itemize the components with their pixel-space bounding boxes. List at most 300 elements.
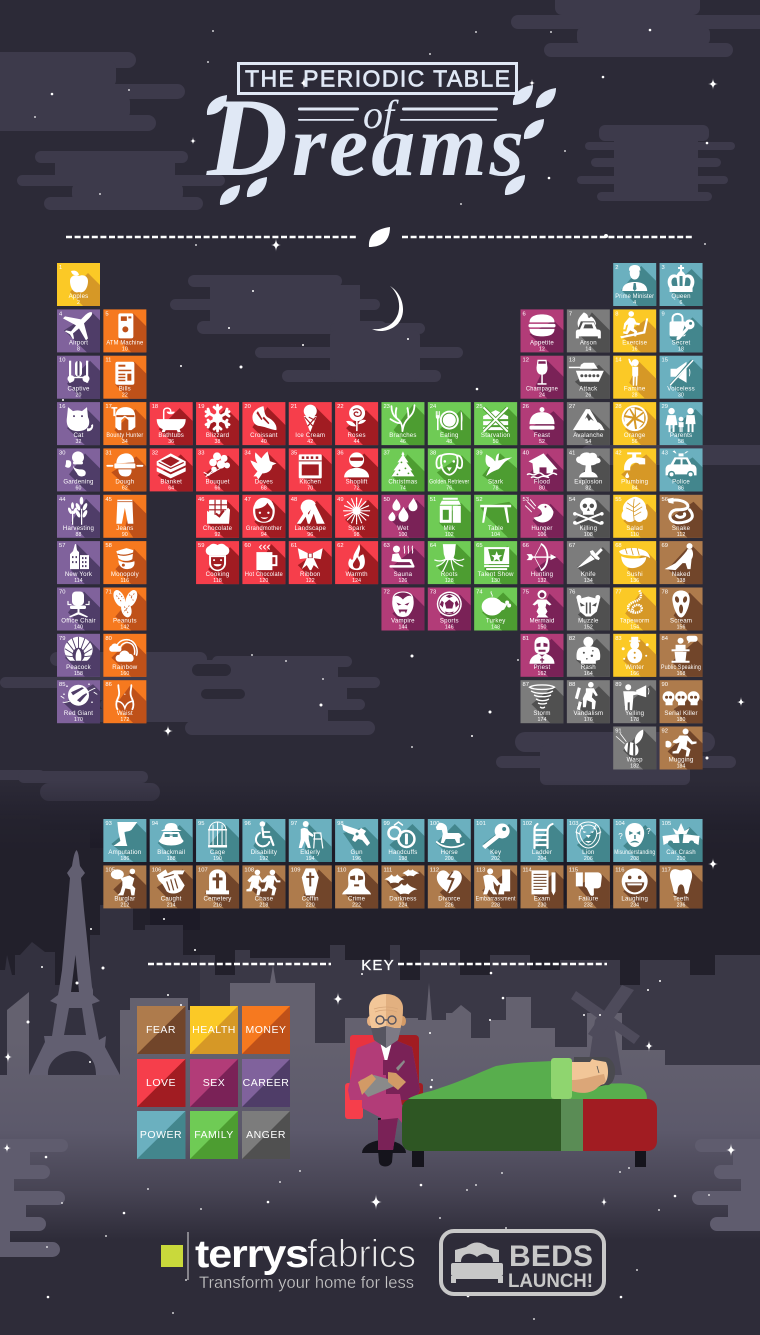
tile: Blizzard: 19 xyxy=(198,404,205,410)
city skyline: dark towers xyxy=(0,815,760,1100)
tile: Hot Chocolate: 120 xyxy=(259,578,268,584)
tile: Failure xyxy=(567,865,610,908)
tile: Table xyxy=(474,495,517,538)
tile: Cage: 190 xyxy=(213,856,222,862)
tile: Knife: 67 xyxy=(569,543,575,549)
tile: Gun: 98 xyxy=(337,821,344,827)
tile: Gun: Gun xyxy=(351,849,363,856)
tile: Knife: Knife xyxy=(581,571,596,578)
icon: thin person xyxy=(628,359,639,386)
tile: Harvesting: Harvesting xyxy=(63,525,94,532)
tile: Scream xyxy=(660,588,703,630)
tile: Red Giant: Red Giant xyxy=(64,710,93,717)
tile: Prime Minister: 4 xyxy=(633,300,636,306)
tile: Disability: Disability xyxy=(251,849,278,856)
title leaves xyxy=(207,85,556,205)
tile: Yelling: 178 xyxy=(630,717,639,723)
tile: Appetite xyxy=(520,309,564,352)
logo: terrys fabrics: fabrics xyxy=(307,1233,416,1276)
tile: Sushi: 68 xyxy=(615,543,622,549)
tile: Arson: 7 xyxy=(569,311,572,317)
tile: Peacock xyxy=(57,634,100,677)
tile: Branches: 23 xyxy=(383,404,390,410)
tile: Prime Minister: Prime Minister xyxy=(615,293,654,300)
windmill silhouette xyxy=(571,985,640,1075)
icon: bill xyxy=(115,362,134,385)
icon: tap xyxy=(624,452,645,478)
tile: Bouquet: 66 xyxy=(215,485,221,491)
key heading: KEY xyxy=(361,957,395,974)
icon: parents and child xyxy=(666,408,696,432)
tile: Wasp xyxy=(613,726,656,770)
tile: Disability xyxy=(242,819,285,862)
tile: Ribbon: Ribbon xyxy=(300,571,321,578)
icon: water drops xyxy=(388,498,417,522)
tile: Elderly xyxy=(289,819,332,862)
logo: terrys fabrics xyxy=(161,1232,416,1292)
icon: burger xyxy=(528,314,556,336)
tile: Tapeworm xyxy=(613,588,656,630)
tile: Harvesting: 44 xyxy=(59,497,66,503)
tile: Burglar: 212 xyxy=(120,902,129,908)
tile: Teeth xyxy=(660,865,703,908)
tile: Sauna: 126 xyxy=(398,578,407,584)
icon: mermaid xyxy=(532,590,552,618)
tile: Bathtubs: 36 xyxy=(168,439,174,445)
tile: Croissant: 20 xyxy=(244,404,251,410)
tile: Knife xyxy=(567,541,610,584)
tile: Christmas xyxy=(381,448,424,491)
tile: Waist: Waist xyxy=(117,710,133,717)
armchair xyxy=(345,1035,423,1153)
tile: Roots: Roots xyxy=(441,571,458,578)
tile: Exam: Exam xyxy=(534,895,550,902)
icon: wasp xyxy=(616,730,643,756)
tile: Failure: 232 xyxy=(584,902,593,908)
tile: Rainbow xyxy=(103,634,146,677)
tile: Misunderstanding xyxy=(613,819,656,862)
tile: Teeth: 236 xyxy=(677,902,686,908)
tile: Roots xyxy=(428,541,471,584)
tile: Kitchen: Kitchen xyxy=(299,478,321,485)
tile: Doves xyxy=(242,448,285,491)
tile: Champagne: 24 xyxy=(539,393,545,399)
icon: bow xyxy=(298,548,323,570)
icon: office chair xyxy=(68,592,89,618)
tile: Mermaid: 75 xyxy=(522,590,529,596)
icon: mug with steam xyxy=(256,545,276,570)
tile: Storm: Storm xyxy=(533,710,551,717)
tile: Blackmail: 188 xyxy=(167,856,176,862)
tile: Gun xyxy=(335,819,378,862)
tile: Vampire: Vampire xyxy=(391,618,415,624)
tile: Wet: Wet xyxy=(397,525,409,532)
tile: Table: 104 xyxy=(491,532,500,538)
tile: Rash: 82 xyxy=(569,636,575,642)
icon: dagger xyxy=(577,548,603,568)
tile: Waist xyxy=(103,680,146,723)
tile: Captive: 20 xyxy=(76,393,81,399)
tile: Shoplift: 36 xyxy=(337,450,344,456)
tile: Eating: 48 xyxy=(446,439,452,445)
tile: New York: New York xyxy=(65,571,93,578)
icon: car crash xyxy=(663,823,700,846)
tile: Blizzard xyxy=(196,402,239,445)
icon: planet xyxy=(61,683,97,706)
tile: Muzzle xyxy=(567,588,610,630)
tile: Sports: Sports xyxy=(440,618,459,624)
tile: Rainbow: 160 xyxy=(120,671,129,677)
tile: Priest xyxy=(520,634,564,677)
tile: Landscape: 48 xyxy=(291,497,297,503)
tile: Caught xyxy=(150,865,193,908)
tile: Snake: Snake xyxy=(672,525,691,532)
tile: Blackmail: 94 xyxy=(152,821,159,827)
city skyline: near dark layer xyxy=(200,945,760,1120)
tile: Cage: 95 xyxy=(198,821,205,827)
tile: Winter: 166 xyxy=(630,671,639,677)
tile: Red Giant xyxy=(57,680,100,723)
tile: Cat: 16 xyxy=(59,404,65,410)
icon: Eiffel tower xyxy=(29,850,120,1075)
tile: Vampire: 144 xyxy=(398,624,407,630)
city skyline: middle layer xyxy=(0,905,200,1100)
tile: Winter: 83 xyxy=(615,636,622,642)
tile: Public Speaking: 84 xyxy=(662,636,669,642)
tile: Elderly: 194 xyxy=(306,856,315,862)
icon: dog face xyxy=(436,454,462,475)
key: Fear xyxy=(137,1006,186,1054)
tile: Famine xyxy=(613,356,656,399)
tile: Jeans: Jeans xyxy=(116,525,133,532)
icon: bed xyxy=(451,1242,503,1283)
tile: Gardening: Gardening xyxy=(63,478,94,485)
tile: Wasp: Wasp xyxy=(627,756,643,764)
tile: Croissant xyxy=(242,402,285,445)
tile: Champagne: Champagne xyxy=(526,386,558,393)
icon: ATM xyxy=(118,313,133,338)
icon: laughing face xyxy=(622,868,648,894)
tile: Queen xyxy=(660,263,703,306)
icon: rose xyxy=(346,405,366,431)
icon: two runners xyxy=(246,870,280,895)
tile: Office Chair: Office Chair xyxy=(61,618,96,624)
tile: Handcuffs xyxy=(381,819,424,862)
tile: Gun: 196 xyxy=(352,856,361,862)
tile: Wet: 100 xyxy=(398,532,407,538)
tile: Cat xyxy=(57,402,100,445)
icon: flooded house xyxy=(528,453,558,478)
tile: Peacock: 79 xyxy=(59,636,65,642)
tile: Attack xyxy=(567,356,610,399)
tile: Hunger: Hunger xyxy=(531,525,553,532)
tile: Darkness: 224 xyxy=(398,902,407,908)
tile: ATM Machine: 10 xyxy=(122,346,128,352)
icon: stork xyxy=(486,453,512,476)
tile: Laughing: 116 xyxy=(615,867,624,873)
icon: shackled hands behind bars xyxy=(68,361,90,383)
tile: Dough: 31 xyxy=(105,450,112,456)
tile: Wasp: 182 xyxy=(630,764,639,770)
tile: Secret xyxy=(660,309,703,352)
tile: Voiceless: Voiceless xyxy=(667,386,695,393)
logo: terrys fabrics: terrys xyxy=(195,1233,308,1276)
tile: Rash: Rash xyxy=(581,664,596,671)
tile: Dough xyxy=(103,448,146,491)
tile: Waist: 172 xyxy=(120,717,129,723)
clouds: centre behind moon xyxy=(170,275,463,382)
icon: vampire face xyxy=(392,592,414,617)
tile: Explosion: 41 xyxy=(569,450,575,456)
tile: Misunderstanding: 104 xyxy=(615,821,626,827)
tile: Bills xyxy=(103,356,146,399)
tile: Milk: 51 xyxy=(430,497,436,503)
tile: Mermaid xyxy=(520,588,564,630)
icon: sushi xyxy=(619,548,650,568)
tile: Peacock: 158 xyxy=(74,671,83,677)
tile: Darkness: Darkness xyxy=(389,895,417,902)
icon: ice cream xyxy=(304,405,317,432)
tile: Amputation: Amputation xyxy=(108,849,141,856)
tile: Ice Cream xyxy=(289,402,332,445)
tile: Christmas: Christmas xyxy=(388,478,418,485)
tile: Starvation: Starvation xyxy=(481,432,510,439)
tile: Blanket xyxy=(150,448,193,491)
tile: ATM Machine: 5 xyxy=(105,311,109,317)
tile: Peanuts: 71 xyxy=(105,590,112,596)
icon: prime minister xyxy=(622,265,647,291)
tile: Gardening: 30 xyxy=(59,450,65,456)
tile: Avalanche: 54 xyxy=(585,439,591,445)
tile: Apples: 2 xyxy=(77,300,80,306)
tile: Blanket: 32 xyxy=(152,450,158,456)
icon: burglar with sack xyxy=(111,869,135,895)
tile: Spark: 98 xyxy=(354,532,360,538)
tile: Orange: 28 xyxy=(615,404,622,410)
icon: person in sauna xyxy=(389,546,414,568)
key: Sex: SEX xyxy=(203,1077,225,1089)
icon: wheelchair xyxy=(256,821,273,846)
tile: Bills: 11 xyxy=(105,358,111,364)
tile: Muzzle: 76 xyxy=(569,590,575,596)
tile: Laughing: Laughing xyxy=(621,895,648,902)
tile: Dough: 62 xyxy=(122,485,128,491)
tile: Salad: Salad xyxy=(626,525,643,532)
icon: bow and arrow xyxy=(526,544,556,570)
tile: Coffin xyxy=(289,865,332,908)
tile: Kitchen xyxy=(289,448,332,491)
illustration: therapist in armchair xyxy=(345,994,423,1166)
icon: plane xyxy=(63,312,92,340)
tile: Rash: 164 xyxy=(584,671,593,677)
tile: Avalanche xyxy=(567,402,610,445)
clouds: right beside table xyxy=(580,445,760,465)
key: Love xyxy=(137,1059,186,1107)
tile: Key: Key xyxy=(490,849,502,856)
tile: Cemetery: 216 xyxy=(213,902,222,908)
tile: Grandmother xyxy=(242,495,285,538)
tile: Exam: 230 xyxy=(538,902,546,908)
couch legs xyxy=(412,1151,646,1167)
tile: Warmth xyxy=(335,541,378,584)
tile: Disability: 96 xyxy=(244,821,251,827)
tile: Key xyxy=(474,819,517,862)
icon: tooth xyxy=(670,869,692,894)
tile: Roots: 64 xyxy=(430,543,437,549)
tile: Exercise: Exercise xyxy=(622,339,648,346)
tile: Attack: 26 xyxy=(585,393,591,399)
icon: tank xyxy=(569,363,604,382)
illustration: patient on couch xyxy=(402,1057,657,1167)
tile: Bounty Hunter xyxy=(103,402,146,445)
tile: Exam: 114 xyxy=(522,867,533,873)
tile: Grandmother: 94 xyxy=(261,532,267,538)
icon: reclining figure xyxy=(665,543,693,570)
icon: tombstone xyxy=(206,869,229,894)
tile: Caught: Caught xyxy=(161,895,182,902)
tile: Vampire: 72 xyxy=(383,590,390,596)
tile: Roses: Roses xyxy=(347,432,366,439)
trousers and shoe xyxy=(362,1094,410,1166)
tile: Mugging: Mugging xyxy=(669,756,693,764)
tile: Darkness xyxy=(381,865,424,908)
tile: Ice Cream: 42 xyxy=(307,439,313,445)
tile: Blizzard: Blizzard xyxy=(206,432,229,439)
tile: Apples xyxy=(57,263,100,306)
tile: Lion xyxy=(567,819,610,862)
tile: Embarrassment: Embarrassment xyxy=(476,895,516,902)
tile: Teeth: Teeth xyxy=(673,895,689,902)
tile: Hot Chocolate: 60 xyxy=(244,543,251,549)
tile: Appetite: 6 xyxy=(522,311,526,317)
tile: Sports xyxy=(428,588,471,630)
tile: Explosion: Explosion xyxy=(574,478,602,485)
tile: Chase xyxy=(242,865,285,908)
tile: Salad: 55 xyxy=(615,497,622,503)
tile: Vandalism: 176 xyxy=(584,717,593,723)
tile: Monopoly: 116 xyxy=(121,578,129,584)
tile: Office Chair: 70 xyxy=(59,590,65,596)
icon: flame xyxy=(348,544,365,570)
key: Power: POWER xyxy=(140,1129,182,1141)
tile: Kitchen: 35 xyxy=(291,450,297,456)
logo: Beds Launch xyxy=(441,1231,604,1294)
key: Money xyxy=(242,1006,290,1054)
tile: Embarrassment: 228 xyxy=(491,902,500,908)
icon: christmas tree xyxy=(391,451,414,476)
key panel xyxy=(137,1006,290,1159)
tile: Champagne xyxy=(520,356,564,399)
tile: Spark: Spark xyxy=(348,525,366,532)
tile: Arson xyxy=(567,309,610,352)
ground and near buildings xyxy=(0,965,760,1335)
icon: cloche xyxy=(530,407,554,430)
tile: Disability: 192 xyxy=(259,856,268,862)
icon: bathtub xyxy=(157,408,186,432)
tile: Chocolate: Chocolate xyxy=(203,525,233,532)
blanket cuff xyxy=(551,1058,572,1099)
tile: Amputation: 93 xyxy=(105,821,112,827)
tile: Voiceless xyxy=(660,356,703,399)
icon: balaclava xyxy=(342,868,371,894)
tile: Killing xyxy=(567,495,610,538)
icon: snowman xyxy=(622,637,649,663)
icon: hungry mouth xyxy=(526,500,554,522)
tile: Sushi: Sushi xyxy=(627,571,643,578)
tile: Snake xyxy=(660,495,703,538)
tile: Christmas: 37 xyxy=(383,450,390,456)
tile: Vandalism: Vandalism xyxy=(573,710,603,717)
icon: burning car xyxy=(576,312,601,338)
tile: Captive: Captive xyxy=(67,386,90,393)
key: Family xyxy=(190,1111,238,1159)
icon: helmet xyxy=(111,407,135,430)
tile: Stark: 78 xyxy=(493,485,499,491)
tile: Feast xyxy=(520,402,564,445)
icon: sun and mountains xyxy=(297,499,325,524)
tile: Flood xyxy=(520,448,564,491)
tile: Cage: Cage xyxy=(210,849,226,856)
tile: Wet: 50 xyxy=(383,497,390,503)
tile: Appetite: Appetite xyxy=(530,339,554,346)
icon: confused face: ? xyxy=(646,827,651,836)
tile: Talent Show: 65 xyxy=(476,543,483,549)
tile: Kitchen: 70 xyxy=(307,485,313,491)
tile: Handcuffs: Handcuffs xyxy=(388,849,418,856)
icon: dove xyxy=(250,451,276,479)
tile: Bounty Hunter: 17 xyxy=(105,404,112,410)
tile: Failure: Failure xyxy=(578,895,599,902)
icon: rainbow and clouds xyxy=(109,640,137,662)
icon: muzzle mask xyxy=(576,595,600,616)
icon: lettuce xyxy=(621,497,648,522)
icon: exam papers and pencil xyxy=(532,870,556,895)
tile: Secret: 9 xyxy=(662,311,665,317)
tile: Public Speaking: Public Speaking xyxy=(661,664,701,671)
tile: Sushi: 136 xyxy=(630,578,639,584)
tile: Stark: Stark xyxy=(488,478,504,485)
tile: Christmas: 74 xyxy=(400,485,406,491)
title word: Dreams: Dreams xyxy=(206,76,527,200)
tile: Parents: Parents xyxy=(670,432,692,439)
key: Power xyxy=(137,1111,186,1159)
tile: Burglar: 105 xyxy=(105,867,115,873)
tile: Flood: Flood xyxy=(534,478,550,485)
tile: Cemetery: 107 xyxy=(198,867,208,873)
tile: Sports: 146 xyxy=(445,624,454,630)
tile: Ribbon: 122 xyxy=(306,578,315,584)
title box: The Periodic Table: THE PERIODIC TABLE xyxy=(245,66,510,92)
icon: wheat xyxy=(67,497,88,525)
icon: confused face: ? xyxy=(618,832,623,841)
tile: Airport xyxy=(57,309,100,352)
tile: Snake: 112 xyxy=(677,532,685,538)
tile: Plumbing xyxy=(613,448,656,491)
tile: Turkey xyxy=(474,588,517,630)
tile: Cooking xyxy=(196,541,239,584)
icon: stacked tokens xyxy=(116,548,135,569)
tile: Ribbon xyxy=(289,541,332,584)
icon: skull and crossbones xyxy=(573,498,604,525)
tile: Explosion: 82 xyxy=(585,485,591,491)
tile: Turkey: 148 xyxy=(491,624,500,630)
tile: Apples: Apples xyxy=(69,293,88,300)
tile: Caught: 214 xyxy=(167,902,176,908)
tile: Gardening xyxy=(57,448,100,491)
tile: Peanuts: Peanuts xyxy=(113,618,137,624)
tile: Eating: Eating xyxy=(440,432,459,439)
icon: mushroom cloud xyxy=(576,452,601,477)
